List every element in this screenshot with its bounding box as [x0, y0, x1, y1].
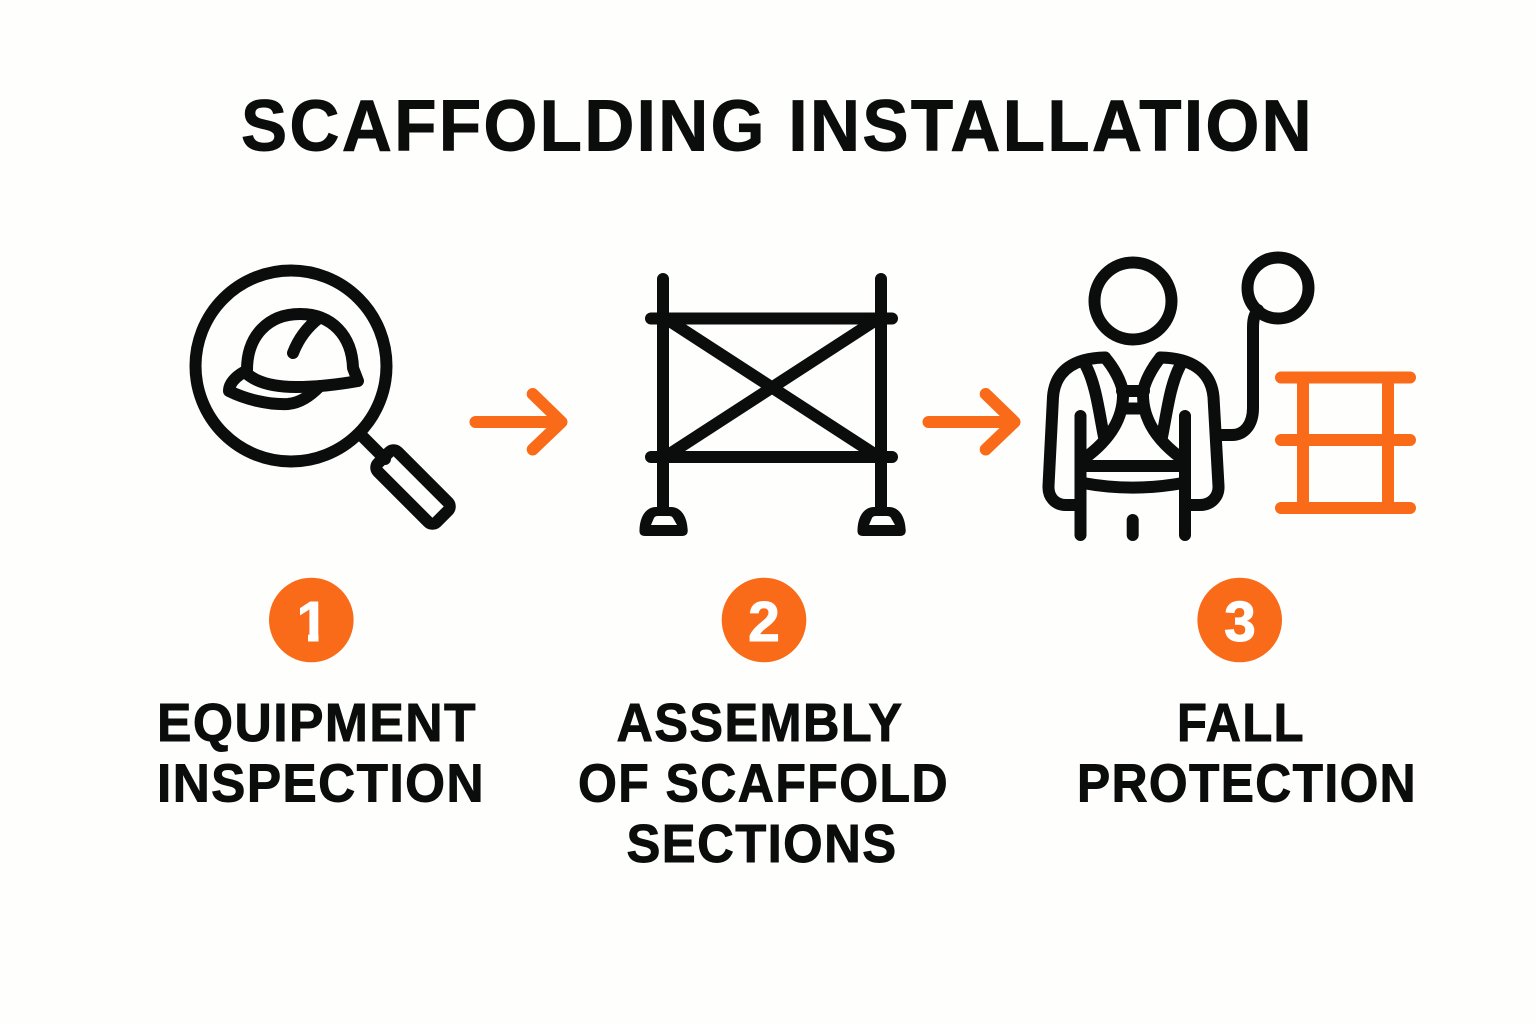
step 1 label: EQUIPMENT [157, 693, 477, 753]
icon: magnifying glass over hard hat [196, 270, 452, 526]
scaffold cross braces [668, 320, 876, 455]
step 2 label [578, 693, 949, 874]
step 1 label: INSPECTION [157, 754, 485, 814]
magnifier handle [363, 437, 452, 526]
scaffold ledgers [651, 318, 892, 457]
step 3 badge [1197, 578, 1282, 662]
harness chest buckle [1122, 391, 1144, 408]
harness belts [1083, 466, 1183, 488]
step 3 label: PROTECTION [1077, 754, 1417, 814]
step 2 label: SECTIONS [626, 814, 898, 874]
step 2 badge: 2 [748, 590, 780, 654]
icon: worker in safety harness [1048, 258, 1308, 535]
icon: orange guardrail [1281, 378, 1410, 508]
step 3 label: FALL [1177, 693, 1305, 753]
step 2 label: OF SCAFFOLD [578, 754, 949, 814]
icon: scaffold frame [639, 279, 906, 536]
step 2 badge [722, 578, 806, 662]
harness straps [1085, 358, 1181, 458]
step 1 badge [269, 578, 354, 662]
hard hat [229, 314, 358, 404]
anchor ring and lanyard [1220, 258, 1308, 435]
scaffold uprights [663, 279, 881, 510]
arrow: step 2 to step 3 [928, 394, 1014, 450]
harness leg straps [1080, 416, 1185, 535]
step 1 badge: 1 [297, 590, 328, 654]
step 3 label [1077, 693, 1417, 814]
step 1 label [157, 693, 485, 814]
magnifier lens [196, 270, 386, 462]
step 2 label: ASSEMBLY [616, 693, 904, 753]
title: SCAFFOLDING INSTALLATION [241, 86, 1314, 166]
step 3 badge: 3 [1224, 590, 1256, 654]
worker head [1094, 262, 1172, 340]
arrow: step 1 to step 2 [476, 394, 562, 450]
scaffold base plates [639, 507, 906, 536]
worker body outline [1048, 358, 1219, 505]
